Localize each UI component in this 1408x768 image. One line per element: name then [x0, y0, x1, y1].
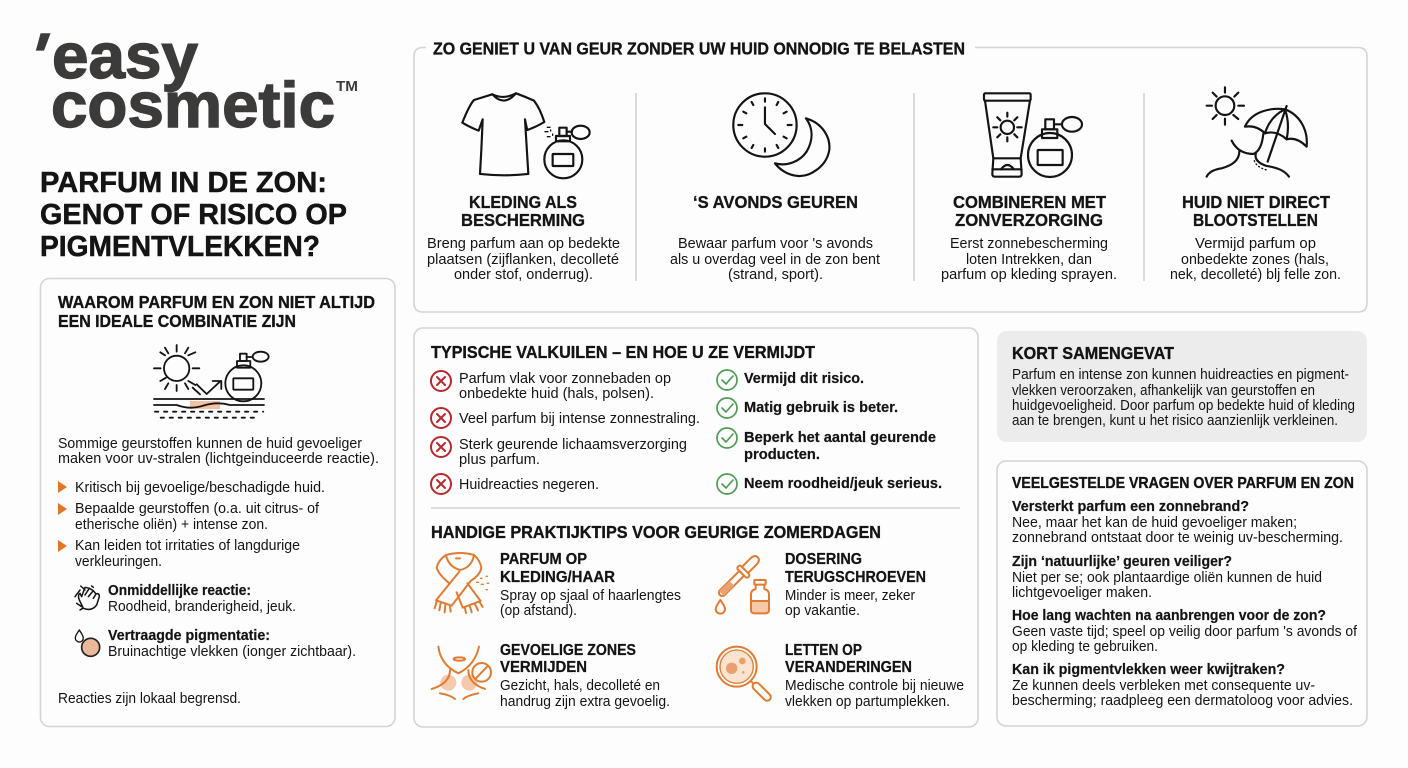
panel heading: VEELGESTELDE VRAGEN OVER PARFUM EN ZON: [1012, 475, 1354, 492]
tip text: [500, 642, 670, 710]
tip text: [785, 642, 964, 710]
list: pitfalls: Sterk geurende lichaamsverzorging: [459, 437, 687, 453]
tip text: VERANDERINGEN: [785, 659, 912, 676]
list: remedies: Vermijd dit risico.: [744, 371, 864, 387]
card heading: KLEDING ALS: [469, 192, 577, 212]
faq 1: [1012, 499, 1343, 546]
faq 2: Zijn ‘natuurlijke’ geuren veiliger?: [1012, 554, 1232, 570]
card text: [670, 236, 880, 283]
footnote: Reacties zijn lokaal begrensd.: [58, 691, 241, 707]
summary text: [1012, 367, 1355, 429]
tip text: KLEDING/HAAR: [500, 569, 615, 586]
card heading: ZONVERZORGING: [955, 210, 1103, 230]
panel heading: EEN IDEALE COMBINATIE ZIJN: [58, 311, 296, 331]
title: GENOT OF RISICO OP: [40, 199, 347, 231]
card text: loten Intrekken, dan: [966, 252, 1092, 268]
faq 1: zonnebrand ontstaat door te weinig uv-bescherming.: [1012, 530, 1343, 546]
tip text: Medische controle bij nieuwe: [785, 678, 964, 694]
icon: sun, umbrella and neck: [1207, 87, 1307, 177]
panel heading: ZO GENIET U VAN GEUR ZONDER UW HUID ONNODIG TE BELASTEN: [433, 38, 965, 58]
immediate reaction text: Roodheid, branderigheid, jeuk.: [108, 599, 296, 615]
logo: easy cosmetic: ': [19, 20, 57, 92]
faq 1: Versterkt parfum een zonnebrand?: [1012, 499, 1249, 515]
faq 4: bescherming; raadpleeg een dermatoloog voor advies.: [1012, 693, 1353, 709]
card heading: [953, 192, 1106, 230]
delayed pigmentation text: Vertraagde pigmentatie:: [108, 628, 270, 644]
card text: [941, 236, 1117, 283]
faq 2: [1012, 554, 1322, 601]
list: pitfalls: Parfum vlak voor zonnebaden op: [459, 371, 671, 387]
icon: sun, perfume and skin: [154, 345, 269, 418]
tip: dosering terugschroeven: [715, 551, 926, 619]
summary text: vlekken veroorzaken, afhankelijk van geurstoffen en: [1012, 383, 1315, 399]
icon: irritated hand: [75, 586, 99, 610]
panel: zo geniet u van geur: [414, 38, 1367, 312]
icon: clock and moon: [733, 93, 829, 176]
panel heading: [58, 292, 375, 331]
tip text: (op afstand).: [500, 603, 577, 619]
card: 's avonds geuren: [670, 93, 880, 283]
list: pitfalls: Huidreacties negeren.: [459, 477, 599, 493]
title: PARFUM IN DE ZON:: [40, 167, 327, 199]
bullet list: [58, 480, 325, 570]
bullet list: etherische oliën) + intense zon.: [75, 517, 268, 533]
bullet list: Kan leiden tot irritaties of langdurige: [75, 538, 300, 554]
title: PIGMENTVLEKKEN?: [40, 231, 320, 263]
card text: [1170, 236, 1341, 283]
card heading: HUID NIET DIRECT: [1182, 192, 1330, 212]
tip text: Minder is meer, zeker: [785, 588, 915, 604]
panel: veelgestelde vragen: [997, 461, 1367, 726]
icon: drop and pigment spot: [75, 630, 100, 656]
icon: sunscreen tube and perfume: [984, 93, 1082, 177]
tip text: Spray op sjaal of haarlengtes: [500, 588, 681, 604]
tip: gevoelige zones vermijden: [432, 642, 670, 710]
card text: [427, 236, 620, 283]
card heading: ‘S AVONDS GEUREN: [693, 192, 858, 212]
list: remedies: [717, 370, 942, 494]
list: pitfalls: plus parfum.: [459, 452, 540, 468]
summary text: aan te brengen, kunt u het risico aanzienlijk verkleinen.: [1012, 413, 1338, 429]
card heading: BESCHERMING: [461, 210, 585, 230]
title: [40, 167, 347, 263]
bullet list: Kritisch bij gevoelige/beschadigde huid.: [75, 480, 325, 496]
card text: parfum op kleding sprayen.: [941, 267, 1117, 283]
logo: easy cosmetic: easy: [52, 20, 198, 92]
immediate reaction text: [108, 583, 296, 615]
card: combineren met zonverzorging: [941, 93, 1117, 283]
card text: nek, decolleté) blj felle zon.: [1170, 267, 1341, 283]
list: pitfalls: [431, 371, 700, 494]
card text: (strand, sport).: [728, 267, 823, 283]
panel heading: WAAROM PARFUM EN ZON NIET ALTIJD: [58, 292, 375, 312]
list: remedies: Neem roodheid/jeuk serieus.: [744, 476, 942, 492]
list: remedies: Matig gebruik is beter.: [744, 400, 898, 416]
tip text: PARFUM OP: [500, 551, 587, 568]
card heading: COMBINEREN MET: [953, 192, 1106, 212]
intro text: Sommige geurstoffen kunnen de huid gevoeliger: [58, 436, 362, 452]
tip text: [785, 551, 926, 619]
delayed pigmentation text: [108, 628, 356, 660]
faq 3: [1012, 608, 1358, 655]
tip text: vlekken op partumplekken.: [785, 694, 950, 710]
tip: letten op veranderingen: [717, 642, 964, 710]
card: huid niet direct blootstellen: [1170, 87, 1341, 283]
tip text: [500, 551, 681, 619]
card text: onbedekte zones (hals,: [1181, 252, 1329, 268]
heading: praktijktips: HANDIGE PRAKTIJKTIPS VOOR GEURIGE ZOMERDAGEN: [431, 522, 881, 542]
logo: easy cosmetic: TM: [336, 78, 358, 95]
panel heading: KORT SAMENGEVAT: [1012, 343, 1174, 363]
faq 3: op kleding te gebruiken.: [1012, 639, 1158, 655]
faq 3: Geen vaste tijd; speel op veilig door parfum 's avonds of: [1012, 624, 1358, 640]
card heading: BLOOTSTELLEN: [1193, 210, 1318, 230]
tip text: GEVOELIGE ZONES: [500, 642, 636, 659]
card text: Breng parfum aan op bedekte: [427, 236, 620, 252]
intro text: maken voor uv-stralen (lichtgeinduceerde reactie).: [58, 451, 379, 467]
card heading: [1182, 192, 1330, 230]
faq 1: Nee, maar het kan de huid gevoeliger maken;: [1012, 515, 1297, 531]
card heading: [461, 192, 585, 230]
faq 4: [1012, 662, 1353, 709]
faq 2: lichtgevoeliger maken.: [1012, 585, 1152, 601]
list: remedies: Beperk het aantal geurende: [744, 430, 936, 446]
tip text: LETTEN OP: [785, 642, 862, 659]
card text: als u overdag veel in de zon bent: [670, 252, 880, 268]
faq 2: Niet per se; ook plantaardige oliën kunnen de huid: [1012, 570, 1322, 586]
icon: dropper and bottle: [715, 552, 769, 614]
delayed pigmentation text: Bruinachtige vlekken (ionger zichtbaar).: [108, 644, 356, 660]
card text: onder stof, onderrug).: [454, 267, 593, 283]
tip text: DOSERING: [785, 551, 862, 568]
icon: scarf: [435, 553, 489, 613]
logo: easy cosmetic: [19, 20, 358, 141]
summary text: Parfum en intense zon kunnen huidreacties en pigment-: [1012, 367, 1349, 383]
card: kleding als bescherming: [427, 93, 620, 283]
tip text: TERUGSCHROEVEN: [785, 569, 926, 586]
list: pitfalls: onbedekte huid (hals, polsen).: [459, 386, 654, 402]
list: pitfalls: Veel parfum bij intense zonnestraling.: [459, 411, 700, 427]
intro text: [58, 436, 379, 467]
panel: valkuilen en praktijktips: [414, 328, 978, 727]
tip text: Gezicht, hals, decolleté en: [500, 678, 660, 694]
panel: kort samengevat: [997, 331, 1367, 442]
bullet list: verkleuringen.: [75, 554, 162, 570]
card text: Bewaar parfum voor 's avonds: [678, 236, 873, 252]
card text: plaatsen (zijflanken, decolleté: [427, 252, 619, 268]
faq 4: Kan ik pigmentvlekken weer kwijtraken?: [1012, 662, 1285, 678]
card text: Eerst zonnebescherming: [950, 236, 1108, 252]
tip text: handrug zijn extra gevoelig.: [500, 694, 670, 710]
tip text: op vakantie.: [785, 603, 860, 619]
bullet list: Bepaalde geurstoffen (o.a. uit citrus- of: [75, 501, 320, 517]
icon: t-shirt with perfume: [462, 93, 590, 178]
icon: magnifier over spots: [717, 647, 772, 702]
heading: typische valkuilen: TYPISCHE VALKUILEN – EN HOE U ZE VERMIJDT: [431, 342, 815, 362]
card text: Vermijd parfum op: [1195, 236, 1316, 252]
faq 4: Ze kunnen deels verbleken met consequente uv-: [1012, 678, 1315, 694]
icon: neck with prohibition sign: [432, 647, 491, 699]
panel: waarom parfum en zon: [40, 278, 395, 726]
tip: parfum op kleding/haar: [435, 551, 681, 619]
immediate reaction text: Onmiddellijke reactie:: [108, 583, 251, 599]
list: remedies: producten.: [744, 447, 820, 463]
summary text: huidgevoeligheid. Door parfum op bedekte huid of kleding: [1012, 398, 1355, 414]
logo: easy cosmetic: cosmetic: [51, 69, 335, 141]
tip text: VERMIJDEN: [500, 659, 587, 676]
faq 3: Hoe lang wachten na aanbrengen voor de zon?: [1012, 608, 1326, 624]
